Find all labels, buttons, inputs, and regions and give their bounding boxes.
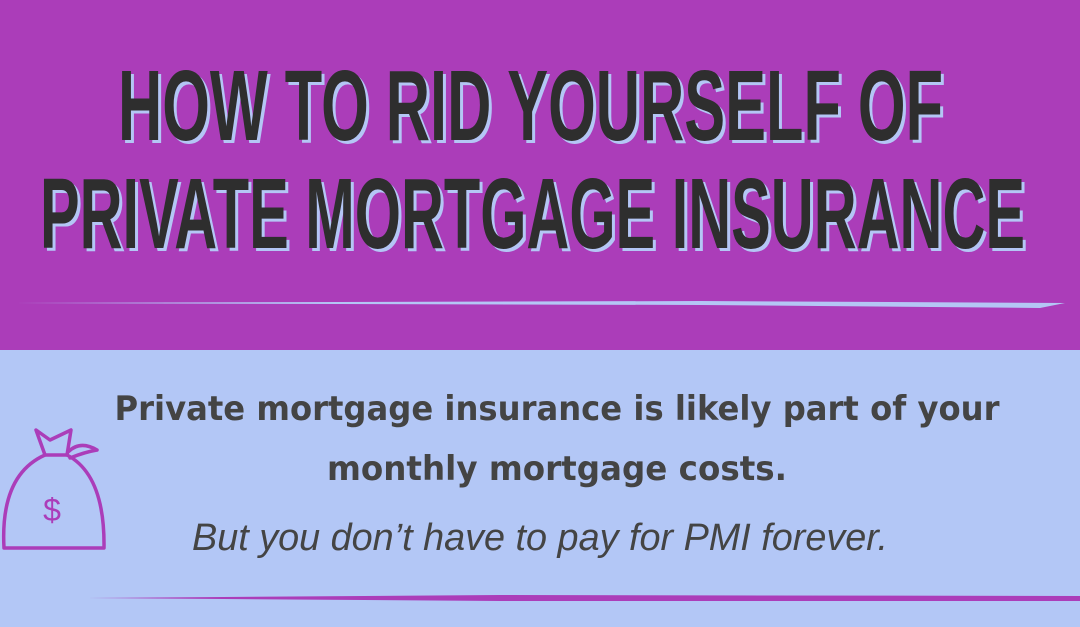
- intro text: Private mortgage insurance is likely part of your: [114, 389, 1000, 429]
- title: [40, 50, 1028, 273]
- bottom divider line: [88, 595, 1080, 601]
- header panel: [0, 0, 1080, 350]
- intro text: monthly mortgage costs.: [327, 449, 787, 489]
- icon: money bag: [4, 430, 104, 548]
- header divider line: [15, 301, 1065, 308]
- intro text: But you don’t have to pay for PMI forever.: [192, 517, 888, 559]
- intro text: [114, 389, 1000, 559]
- icon: money bag: $: [43, 492, 61, 528]
